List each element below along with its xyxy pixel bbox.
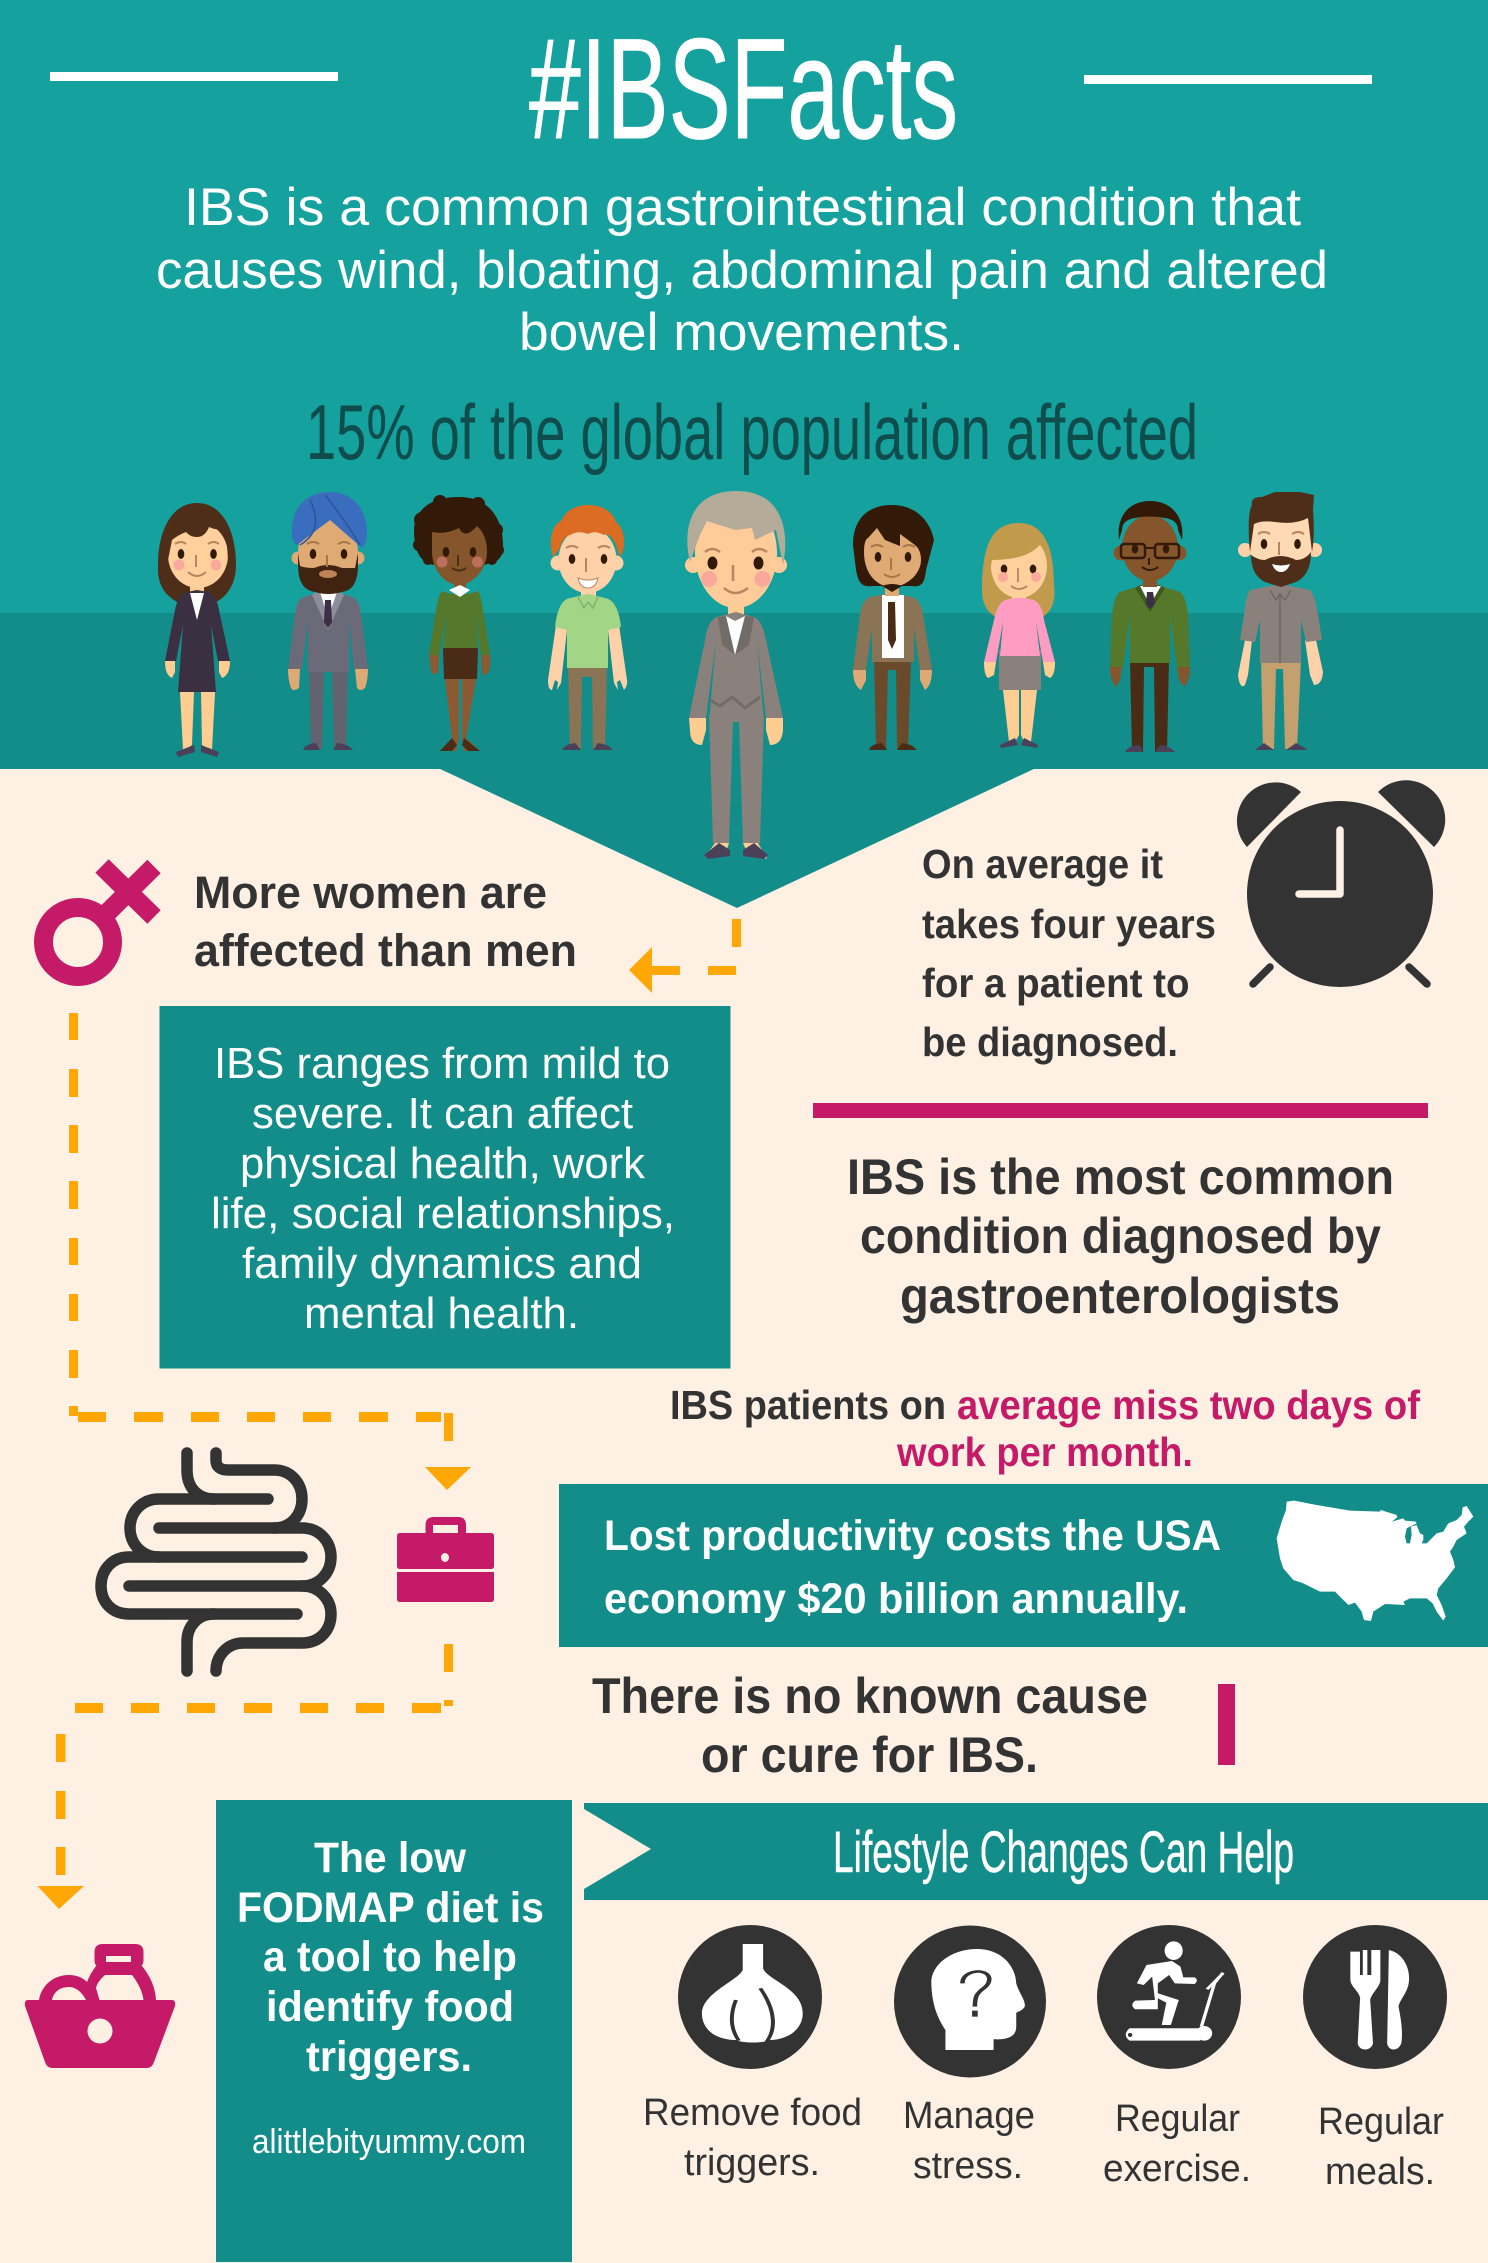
person 8: man with glasses in green sweater	[1110, 501, 1190, 752]
panel text: life, social relationships,	[211, 1189, 675, 1238]
panel text: FODMAP diet is	[237, 1884, 544, 1932]
lifestyle labels: Remove food	[643, 2092, 862, 2134]
text: miss work: IBS patients on	[670, 1382, 946, 1428]
panel text: The low	[314, 1834, 467, 1882]
person 2: man with blue turban	[288, 492, 368, 750]
panel text	[211, 1039, 675, 1338]
icon: food basket	[25, 1944, 175, 2068]
icon: alarm clock	[1237, 780, 1445, 987]
lifestyle labels: exercise.	[1103, 2148, 1251, 2190]
lifestyle labels: stress.	[913, 2145, 1023, 2187]
text: four years	[922, 841, 1216, 1065]
heading: more women	[194, 867, 577, 976]
panel text: physical health, work	[240, 1139, 646, 1188]
lifestyle labels: Manage	[903, 2095, 1035, 2137]
divider bar	[813, 1103, 1428, 1118]
person 3: woman with curly hair	[413, 495, 504, 751]
icon: female symbol	[44, 866, 154, 976]
panel text: family dynamics and	[242, 1239, 642, 1288]
person 7: blonde woman in pink	[982, 523, 1055, 748]
person 9: bearded man in grey shirt	[1238, 492, 1323, 750]
text: four years: for a patient to	[922, 960, 1190, 1006]
heading: no known cause: There is no known cause	[592, 1668, 1148, 1724]
lifestyle labels: triggers.	[684, 2142, 820, 2184]
panel text: identify food	[266, 1983, 514, 2031]
panel text: a tool to help	[263, 1933, 517, 1981]
heading: more women: affected than men	[194, 925, 577, 976]
person 1: woman in dark suit	[158, 503, 236, 757]
person 5: central figure in grey suit	[685, 491, 787, 859]
intro text	[156, 178, 1328, 362]
heading: most common condition: gastroenterologists	[900, 1268, 1340, 1324]
panel text: severe. It can affect	[252, 1089, 633, 1138]
icon: garlic	[678, 1925, 822, 2069]
lifestyle labels: meals.	[1325, 2151, 1435, 2193]
heading: no known cause: or cure for IBS.	[701, 1727, 1038, 1783]
text: four years: takes four years	[922, 901, 1216, 947]
heading: no known cause	[592, 1668, 1148, 1783]
intro text: bowel movements.	[519, 303, 964, 362]
people row	[158, 491, 1323, 859]
person 4: man with orange hair	[548, 505, 627, 750]
text: four years: be diagnosed.	[922, 1019, 1178, 1065]
panel: FODMAP diet	[216, 1800, 572, 2262]
title	[50, 10, 1372, 169]
dashed arrow: triangle to women note	[629, 919, 741, 993]
lifestyle labels	[643, 2092, 1444, 2193]
dashed path: briefcase to basket	[38, 1644, 453, 1909]
icon: fork and knife	[1303, 1925, 1447, 2069]
banner: lifestyle changes	[584, 1803, 1488, 1900]
heading: most common condition	[847, 1149, 1394, 1324]
icon: intestine	[101, 1453, 331, 1671]
text: miss work: average miss two days of	[957, 1382, 1420, 1428]
panel text: Lost productivity costs the USA	[604, 1512, 1221, 1560]
panel: IBS ranges	[160, 1006, 730, 1368]
text: miss work	[670, 1382, 1420, 1475]
intro text: IBS is a common gastrointestinal condition that	[184, 178, 1301, 237]
title: #IBSFacts	[529, 10, 958, 169]
panel text	[237, 1834, 544, 2081]
panel text	[604, 1512, 1221, 1623]
panel text: IBS ranges from mild to	[214, 1039, 670, 1088]
heading: more women: More women are	[194, 867, 547, 918]
header background	[0, 0, 1488, 908]
lifestyle labels: Regular	[1115, 2098, 1240, 2140]
panel text: economy $20 billion annually.	[604, 1575, 1188, 1623]
panel text: mental health.	[304, 1289, 579, 1338]
accent bar	[1218, 1684, 1235, 1765]
person 6: man in brown jacket	[853, 505, 934, 750]
icon: treadmill runner	[1097, 1925, 1241, 2069]
intro text: causes wind, bloating, abdominal pain and altered	[156, 241, 1328, 300]
icon: USA map	[1277, 1501, 1473, 1621]
heading: most common condition: IBS is the most common	[847, 1149, 1394, 1205]
panel: lost productivity	[559, 1484, 1488, 1647]
heading: most common condition: condition diagnosed by	[860, 1208, 1381, 1264]
panel text: triggers.	[306, 2033, 472, 2081]
dashed path: left side to briefcase	[69, 1013, 471, 1490]
icon: head with question mark	[894, 1926, 1046, 2078]
source url: alittlebityummy.com	[252, 2123, 526, 2161]
icon: briefcase	[397, 1517, 494, 1602]
text: miss work: work per month.	[896, 1429, 1193, 1475]
lifestyle labels: Regular	[1318, 2101, 1444, 2143]
text: four years: On average it	[922, 841, 1163, 887]
